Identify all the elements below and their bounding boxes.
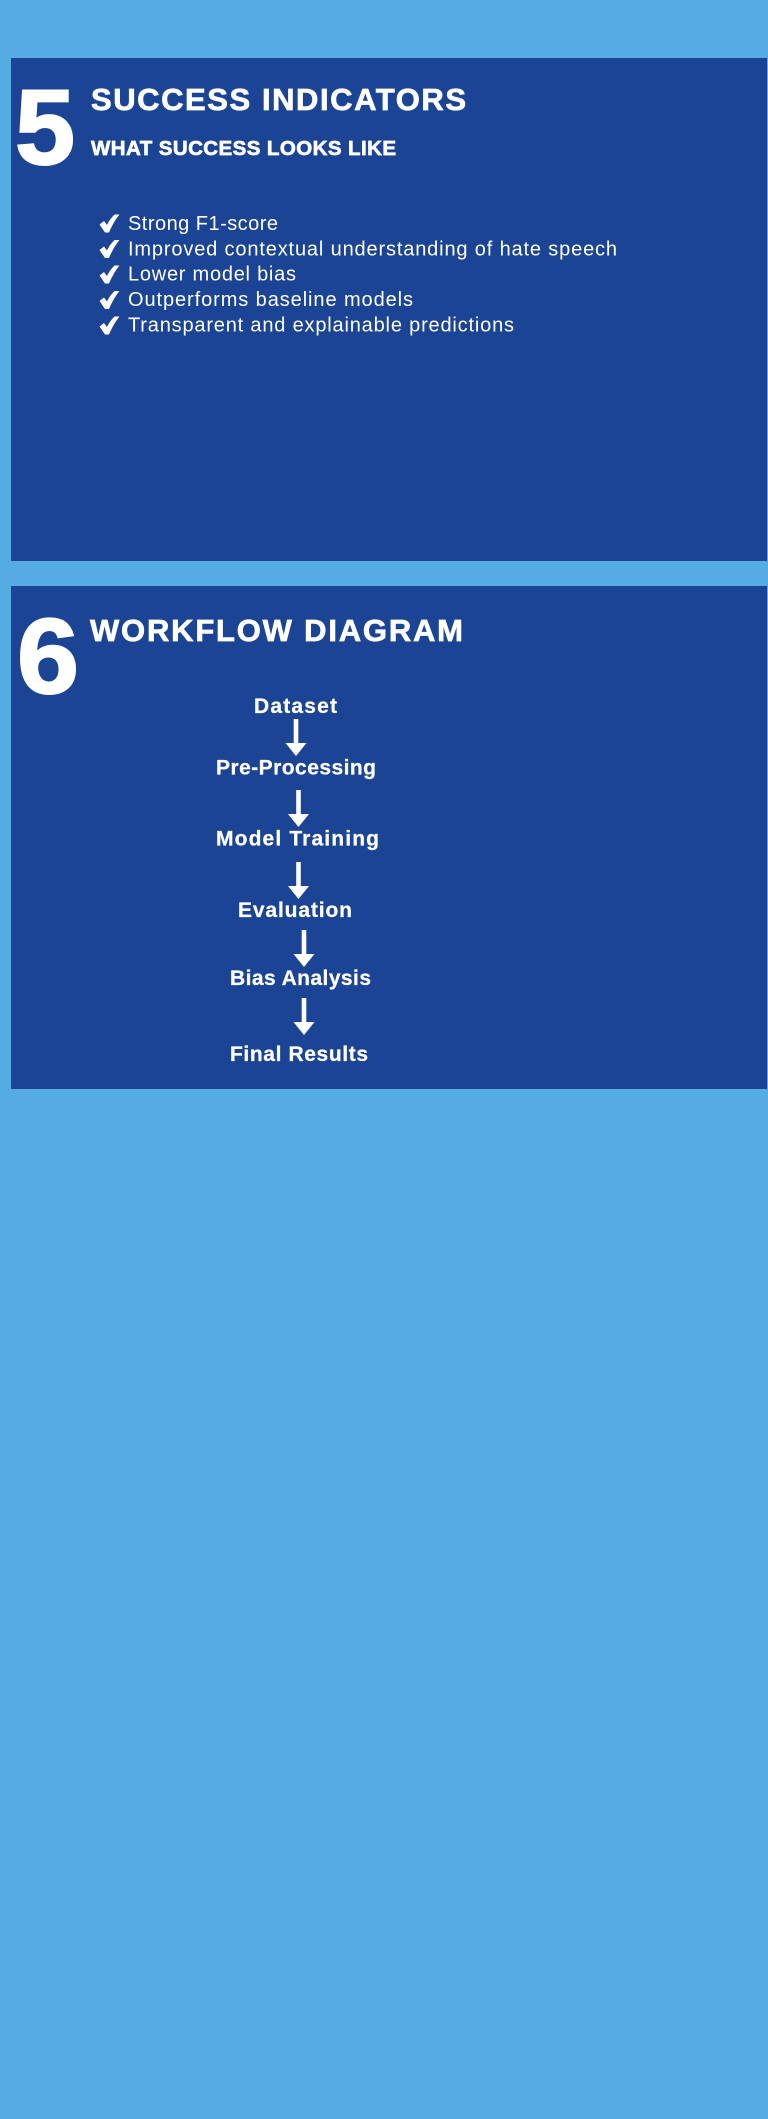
item: strong f1-score: Strong F1-score [128,213,278,235]
heading: success indicators: SUCCESS INDICATORS [91,82,466,117]
item: lower model bias: Lower model bias [128,264,296,286]
arrow: model training to evaluation [288,862,309,899]
step: model training: Model Training [216,828,379,850]
item: outperforms baseline models: Outperforms baseline models [128,289,413,311]
section number 6: 6 [17,596,79,716]
item: transparent and explainable predictions: Transparent and explainable predictions [128,314,514,336]
arrow: evaluation to bias analysis [294,930,314,967]
arrow: bias analysis to final results [294,998,314,1035]
subheading: what success looks like: WHAT SUCCESS LOOKS LIKE [91,137,396,160]
arrow: pre-processing to model training [288,790,309,827]
step: dataset: Dataset [254,695,337,718]
arrow: dataset to pre-processing [286,719,306,756]
flow chart [216,695,379,1066]
step: evaluation: Evaluation [238,899,352,922]
checklist [100,213,617,336]
step: bias analysis: Bias Analysis [230,967,371,990]
panel: success indicators [11,58,767,561]
panel: workflow diagram [11,586,767,1089]
step: final results: Final Results [230,1043,368,1066]
item: contextual understanding: Improved contextual understanding of hate speech [128,238,617,260]
step: pre-processing: Pre-Processing [216,756,376,780]
section number 5: 5 [15,67,75,187]
heading: workflow diagram: WORKFLOW DIAGRAM [90,613,463,648]
